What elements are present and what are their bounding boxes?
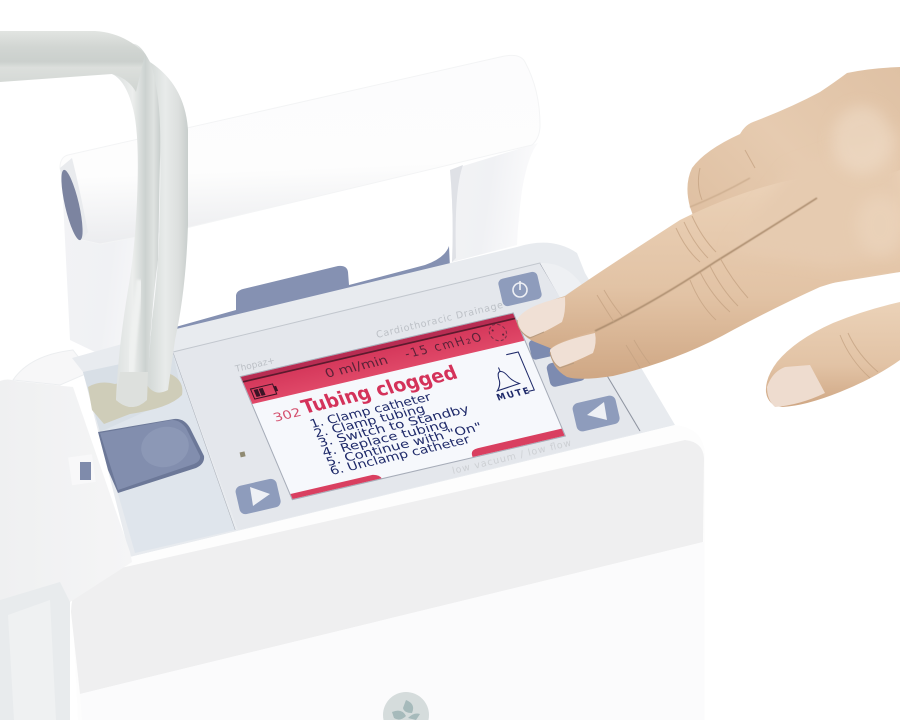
button: power [497, 271, 543, 307]
instruction list: 3. Switch to Standby [316, 402, 471, 450]
lower panel [80, 542, 704, 720]
flow and vacuum readout [322, 330, 484, 381]
pump status dial [487, 323, 509, 342]
bottom soft key tabs [290, 473, 382, 499]
instruction list: 4. Replace tubing [320, 417, 450, 459]
status led [240, 451, 246, 457]
index finger [518, 178, 860, 360]
logo badge [383, 692, 429, 720]
blue grey clamp button [98, 419, 204, 493]
panel labels [233, 300, 573, 477]
tube highlight [130, 280, 140, 375]
middle fingernail [550, 333, 596, 367]
grey band [71, 440, 704, 694]
index fingernail [517, 297, 565, 337]
front tube [112, 44, 160, 407]
panel labels: Thopaz+ [233, 356, 276, 375]
hand [517, 67, 900, 407]
knuckle highlight [832, 106, 892, 174]
instruction list: 1. Clamp catheter [308, 390, 433, 431]
alarm title: Tubing clogged [298, 362, 461, 418]
panel labels: low vacuum / low flow [451, 438, 573, 477]
battery icon [250, 383, 279, 399]
clear tubes [0, 31, 188, 407]
red status bar [241, 314, 524, 404]
knuckle wrinkles [597, 150, 755, 368]
instruction list: 6. Unclamp catheter [327, 432, 472, 478]
screen panel [173, 263, 642, 530]
handle left strut [13, 180, 176, 385]
thumb dimple [137, 422, 193, 472]
white lip [72, 425, 705, 720]
back of hand and fingers behind [687, 67, 900, 285]
handle right strut [450, 143, 538, 262]
cover tab [68, 454, 96, 485]
ring fingernail [767, 365, 825, 407]
tube sleeve [116, 372, 148, 407]
handle end cap [57, 168, 87, 242]
ring finger lower right [766, 302, 900, 407]
left module panel [83, 353, 235, 553]
latch grip behind handle [172, 246, 450, 345]
right cap panel [540, 263, 582, 298]
flow and vacuum readout: -15 cmH₂O [402, 330, 484, 361]
left canister cover [0, 380, 132, 720]
button: right arrow [234, 478, 282, 515]
flow and vacuum readout: 0 ml/min [323, 353, 390, 381]
mute bell icon [481, 352, 536, 403]
LCD screen [240, 312, 566, 500]
mute bell icon: MUTE [495, 386, 531, 403]
instruction list: 2. Clamp tubing [312, 401, 427, 440]
tube socket [88, 372, 182, 424]
handle bar [57, 55, 540, 244]
rear tube [147, 62, 188, 393]
soft blend over knuckles [730, 130, 900, 265]
button: left arrow [571, 394, 621, 433]
horizontal tube run [0, 31, 145, 92]
front body of device [71, 425, 705, 720]
instruction list: 5. Continue with "On" [324, 419, 484, 469]
panel labels: Cardiothoracic Drainage [375, 300, 504, 341]
alarm code: 302 [271, 405, 304, 425]
instruction list [308, 381, 488, 478]
device top surface [72, 243, 675, 557]
button: under fingertip [528, 336, 586, 388]
middle finger [550, 170, 900, 379]
